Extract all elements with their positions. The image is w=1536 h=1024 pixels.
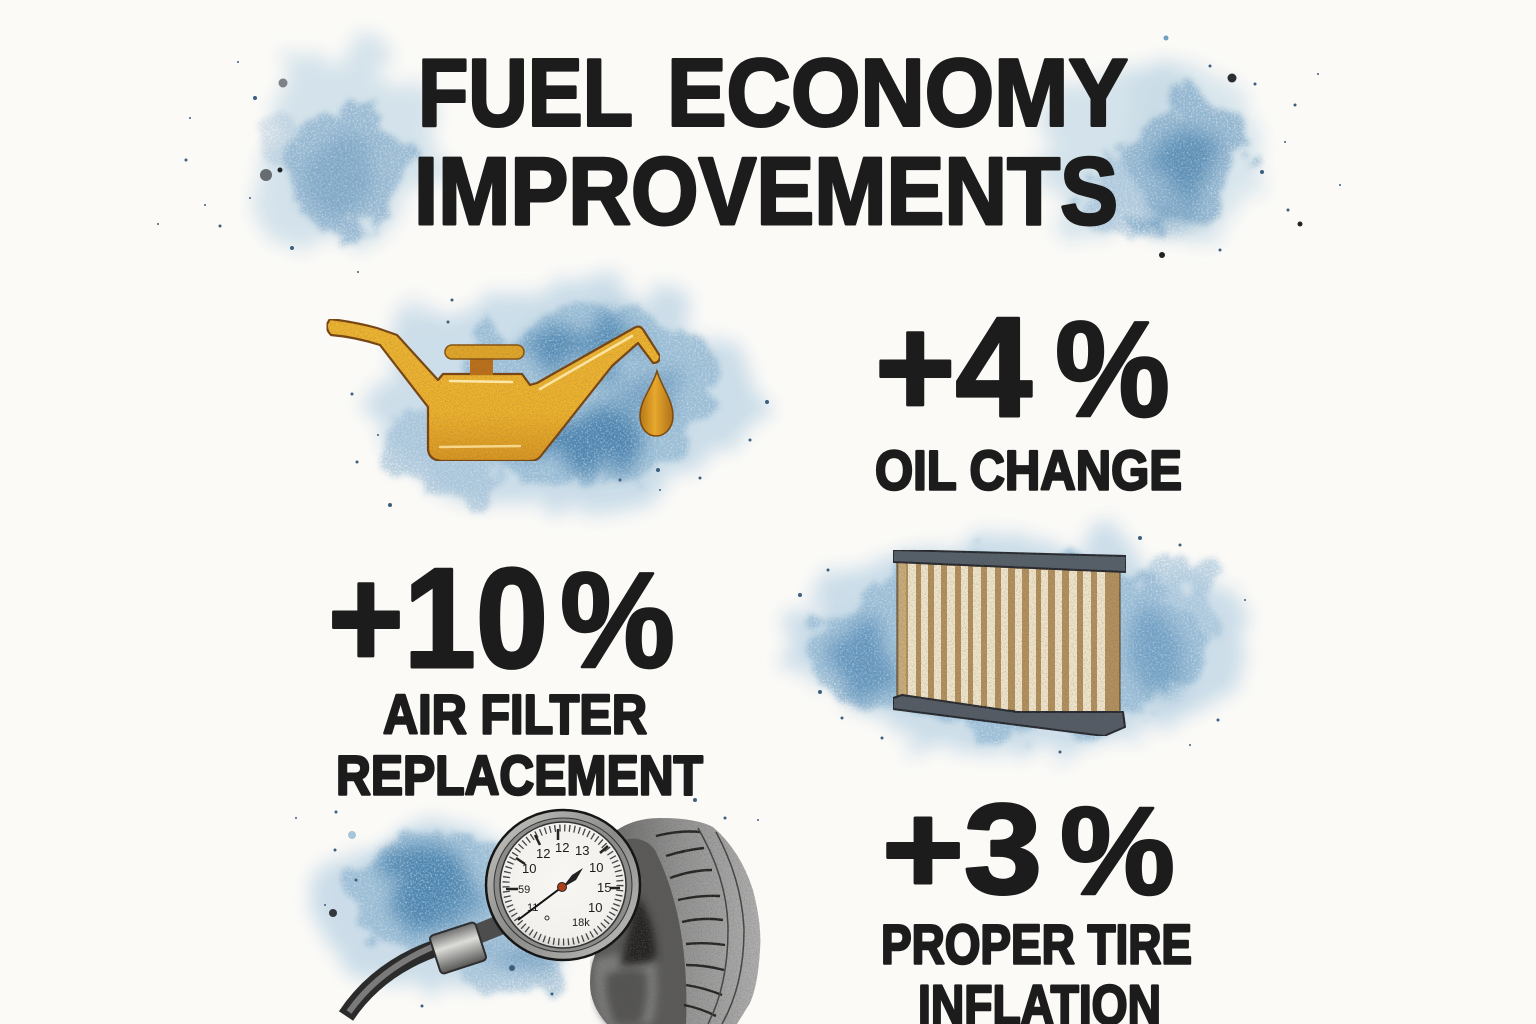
stat: +4% oil change: % <box>1055 293 1170 445</box>
icon: pressure gauge: 18k <box>572 917 590 929</box>
tire watercolor wash <box>310 820 590 990</box>
title: IMPROVEMENTS <box>414 138 1118 245</box>
icon: pressure gauge: 59 <box>518 884 530 896</box>
title <box>414 40 1128 245</box>
stat: +10% air filter replacement: REPLACEMENT <box>336 744 703 806</box>
stat: +3% proper tire inflation: PROPER TIRE <box>881 912 1192 976</box>
icon: pressure gauge: 13 <box>575 843 589 858</box>
title: FUEL <box>418 40 633 146</box>
title: ECONOMY <box>667 40 1128 146</box>
ink speckles <box>157 36 1341 1008</box>
icon: pressure gauge: 10 <box>589 860 603 875</box>
stat: +4% oil change: +4 <box>875 288 1032 447</box>
stat: +4% oil change: OIL CHANGE <box>875 438 1182 502</box>
icon: tire <box>590 818 760 1024</box>
stat: +3% proper tire inflation <box>881 778 1192 1024</box>
icon: oil can <box>327 319 673 461</box>
icon: pressure gauge: 12 <box>536 846 550 861</box>
icon: pressure gauge: 15 <box>597 880 611 895</box>
stat: +10% air filter replacement <box>328 539 703 806</box>
stat: +3% proper tire inflation: % <box>1060 782 1175 921</box>
icon: pressure gauge <box>486 810 640 960</box>
title watercolor wash <box>257 50 1260 250</box>
stat: +10% air filter replacement: +10 <box>328 539 548 698</box>
stat: +10% air filter replacement: AIR FILTER <box>383 682 647 746</box>
icon: pressure gauge: 12 <box>555 840 569 855</box>
icon: hose <box>346 922 500 1016</box>
stat: +3% proper tire inflation: +3 <box>882 778 1042 921</box>
stat: +10% air filter replacement: % <box>560 544 675 696</box>
stat: +4% oil change <box>875 288 1182 502</box>
air filter watercolor wash <box>795 537 1245 753</box>
icon: pressure gauge: 10 <box>588 900 602 915</box>
icon: pressure gauge: 10 <box>522 861 536 876</box>
icon: air filter <box>893 550 1126 736</box>
icon: oil drop <box>640 371 673 436</box>
oil change watercolor wash <box>375 280 755 516</box>
icon: pressure gauge: 11 <box>527 902 538 914</box>
